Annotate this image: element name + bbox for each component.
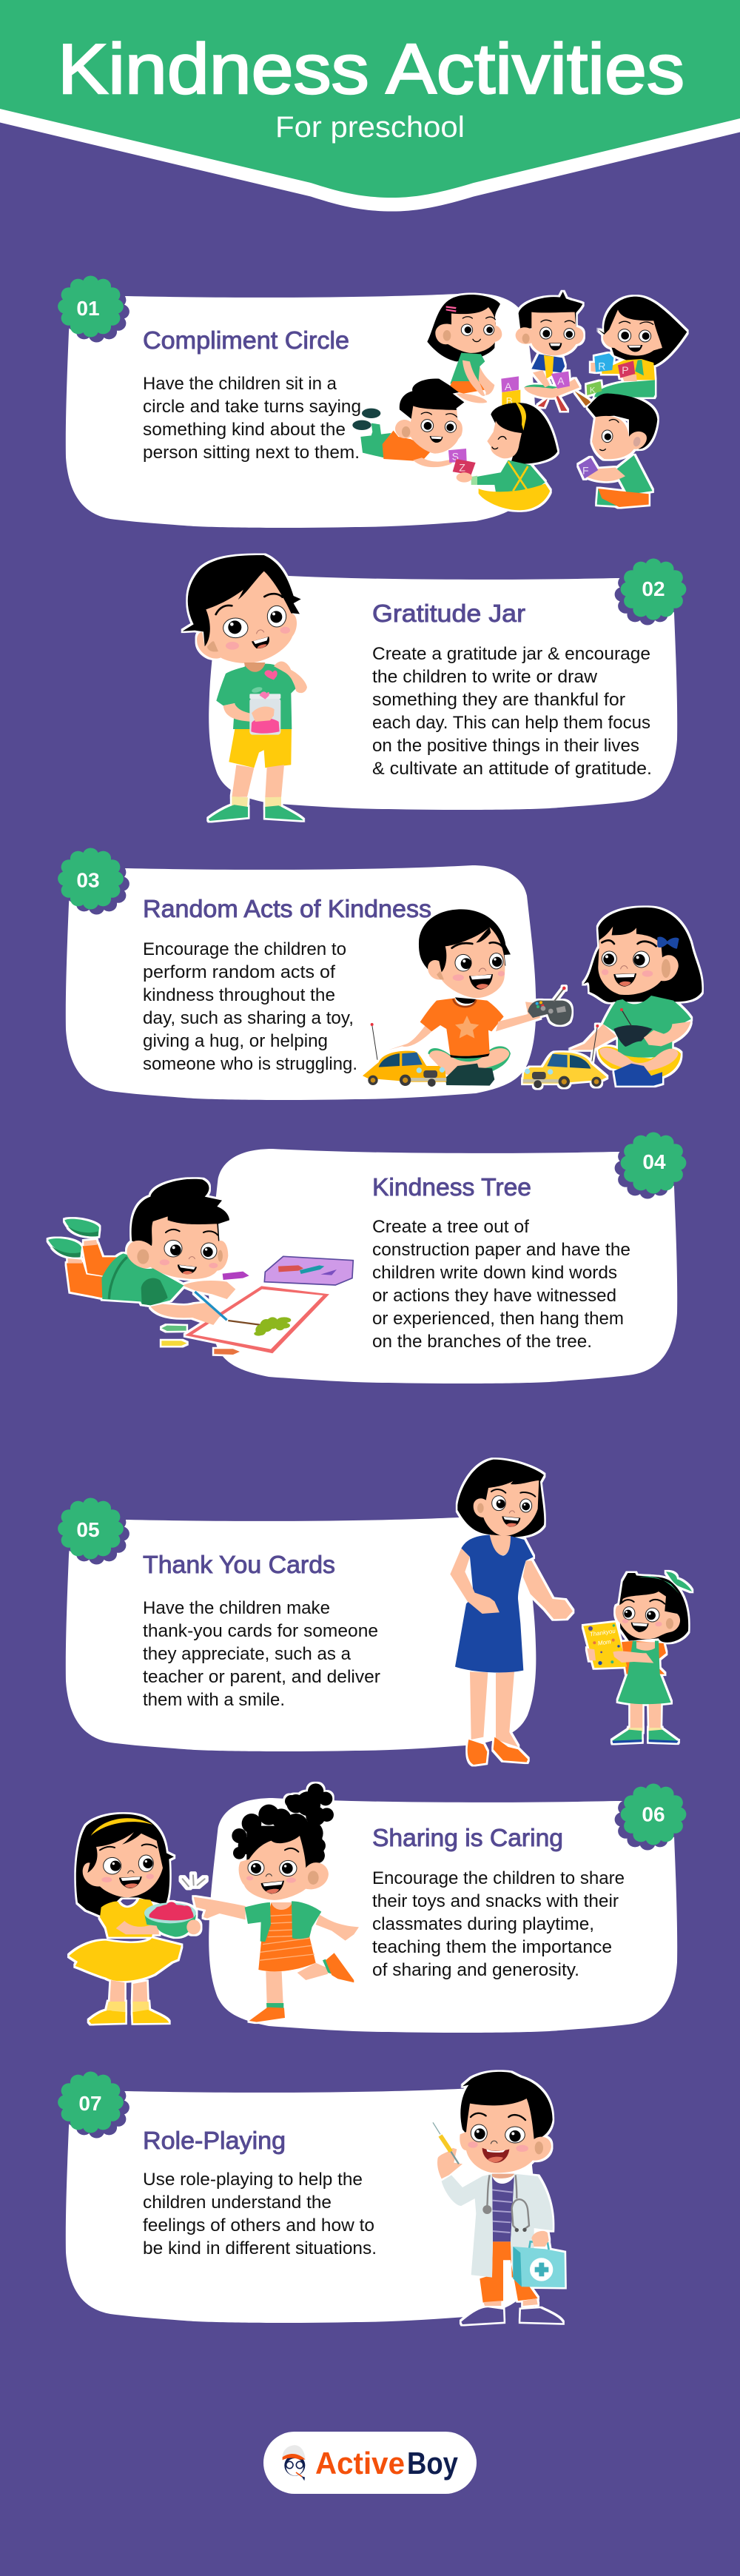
subtitle: For preschool [275,111,465,144]
badge 02 [615,558,686,625]
body text: Have the children sit in a [143,374,337,394]
wordmark [315,2446,459,2481]
wordmark: Boy [407,2446,459,2481]
body text [143,1598,380,1710]
logo: ActiveBoy [263,2432,477,2494]
body text: construction paper and have the [372,1240,630,1260]
illustration: six children playing with blocks: R [598,360,605,372]
body text: be kind in different situations. [143,2238,377,2258]
panel: 05 Thank You Cards [58,1460,692,1765]
panel: 06 Sharing is Caring [69,1783,686,2033]
panel: 04 Kindness Tree [48,1132,686,1383]
icon: boy with cap and glasses [283,2445,306,2481]
body text: or actions they have witnessed [372,1286,616,1306]
body text: the children to write or draw [372,667,598,687]
header banner [0,0,740,212]
body text [372,1217,630,1352]
panel: 01 Compliment Circle [58,275,687,528]
badge 03: 03 [76,869,100,892]
panel: 02 Gratitude Jar [183,555,686,821]
illustration: six children playing with blocks: K [590,386,596,395]
badge 01 [58,275,130,343]
body text [372,1868,625,1980]
body text: something they are thankful for [372,690,625,710]
illustration: six children playing with blocks: S [452,451,459,463]
illustration: six children playing with blocks: P [622,364,629,376]
heading: Sharing is Caring [372,1824,563,1851]
title: Kindness Activities [58,30,684,109]
body text: classmates during playtime, [372,1914,594,1934]
body text: Create a gratitude jar & encourage [372,644,650,664]
body text: giving a hug, or helping [143,1031,328,1051]
body text: someone who is struggling. [143,1054,357,1074]
badge 07 [58,2071,130,2139]
illustration: six children playing with blocks: A [505,380,512,392]
body text: them with a smile. [143,1690,285,1710]
panel: 03 Random Acts of Kindness [58,848,702,1100]
body text [372,644,652,779]
illustration: six children playing with blocks: A [557,375,565,386]
illustration: girl sharing strawberries with friend [69,1783,359,2024]
badge 04 [615,1132,686,1199]
badge 06: 06 [642,1803,665,1826]
body text: Use role-playing to help the [143,2170,363,2190]
heading: Gratitude Jar [372,600,525,627]
body text: children write down kind words [372,1263,617,1283]
body text: person sitting next to them. [143,443,360,463]
body text: feelings of others and how to [143,2216,374,2235]
badge 02: 02 [642,577,665,600]
heading: Thank You Cards [143,1551,335,1578]
body text: on the branches of the tree. [372,1332,592,1352]
body text: thank-you cards for someone [143,1621,378,1641]
illustration: boy and girl with remote-control cars [363,908,702,1088]
body text: Encourage the children to share [372,1868,625,1888]
illustration: mother and girl with thank-you card: Mom [597,1638,612,1647]
body text: kindness throughout the [143,985,335,1005]
body text: teacher or parent, and deliver [143,1667,380,1687]
badge 05: 05 [76,1518,100,1541]
illustration: boy with gratitude jar [183,555,307,821]
heading: Compliment Circle [143,326,349,354]
illustration: six children playing with blocks: F [582,465,589,477]
illustration: six children playing with blocks: B [506,395,513,407]
badge 03 [58,848,130,915]
illustration: six children playing with blocks [352,292,687,510]
body text: Encourage the children to [143,939,346,959]
heading: Kindness Tree [372,1173,531,1201]
body text: children understand the [143,2193,332,2213]
illustration: mother and girl with thank-you card: Thankyou [589,1628,616,1638]
badge 07: 07 [78,2092,102,2115]
body text: each day. This can help them focus [372,713,650,733]
body text: or experienced, then hang them [372,1309,624,1329]
body text: their toys and snacks with their [372,1891,619,1911]
wordmark: Active [315,2446,405,2481]
body text: Create a tree out of [372,1217,529,1237]
body text: & cultivate an attitude of gratitude. [372,759,652,779]
body text: of sharing and generosity. [372,1960,579,1980]
body text [143,374,361,463]
heading: Role-Playing [143,2127,286,2154]
panel: 07 Role-Playing [58,2071,565,2324]
body text: circle and take turns saying [143,397,361,417]
body text: something kind about the [143,420,346,440]
illustration: six children playing with blocks: Z [459,462,465,474]
badge 01: 01 [76,297,100,320]
body text [143,2170,377,2258]
body text: teaching them the importance [372,1937,612,1957]
body text: Have the children make [143,1598,330,1618]
body text: perform random acts of [143,962,335,982]
badge 04: 04 [642,1150,666,1173]
illustration: boy dressed as a doctor [433,2072,565,2324]
body text: on the positive things in their lives [372,736,639,756]
badge 05 [58,1497,130,1565]
body text: they appreciate, such as a [143,1644,352,1664]
body text [143,939,357,1074]
heading: Random Acts of Kindness [143,895,431,922]
illustration: boy drawing a tree on paper [48,1179,353,1355]
illustration: mother and girl with thank-you card [450,1460,692,1765]
badge 06 [615,1783,686,1851]
body text: day, such as sharing a toy, [143,1008,354,1028]
